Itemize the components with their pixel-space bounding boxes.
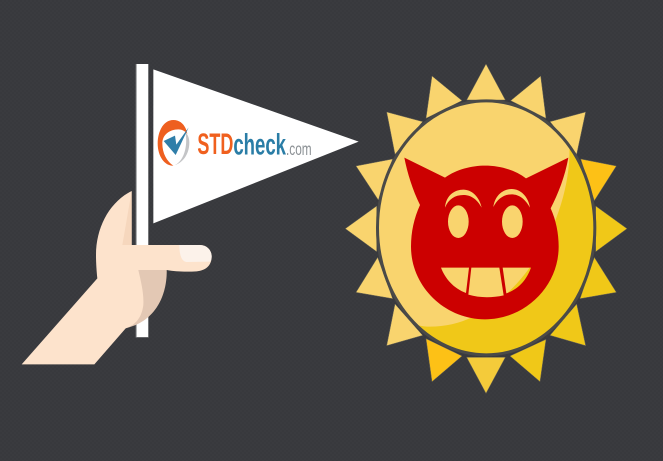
devil face: [404, 158, 568, 319]
devil sun: [345, 64, 627, 393]
thumb crease: [122, 191, 132, 245]
sun rays: [345, 64, 627, 393]
palm shadow: [123, 268, 167, 328]
logo icon: check in ring: [158, 120, 189, 166]
logo wordmark: [197, 128, 312, 162]
pointing finger: [122, 245, 212, 272]
logo wordmark: check: [233, 129, 286, 162]
hand holding flag: [22, 191, 212, 364]
infographic canvas: [22, 64, 627, 394]
arm and thumb: [22, 191, 143, 364]
sun disc: [373, 93, 595, 355]
pennant flag with logo: [153, 69, 359, 223]
logo wordmark: STD: [197, 128, 233, 161]
fingernail: [179, 245, 212, 262]
logo wordmark: .com: [286, 139, 312, 159]
flag pole: [136, 64, 149, 338]
